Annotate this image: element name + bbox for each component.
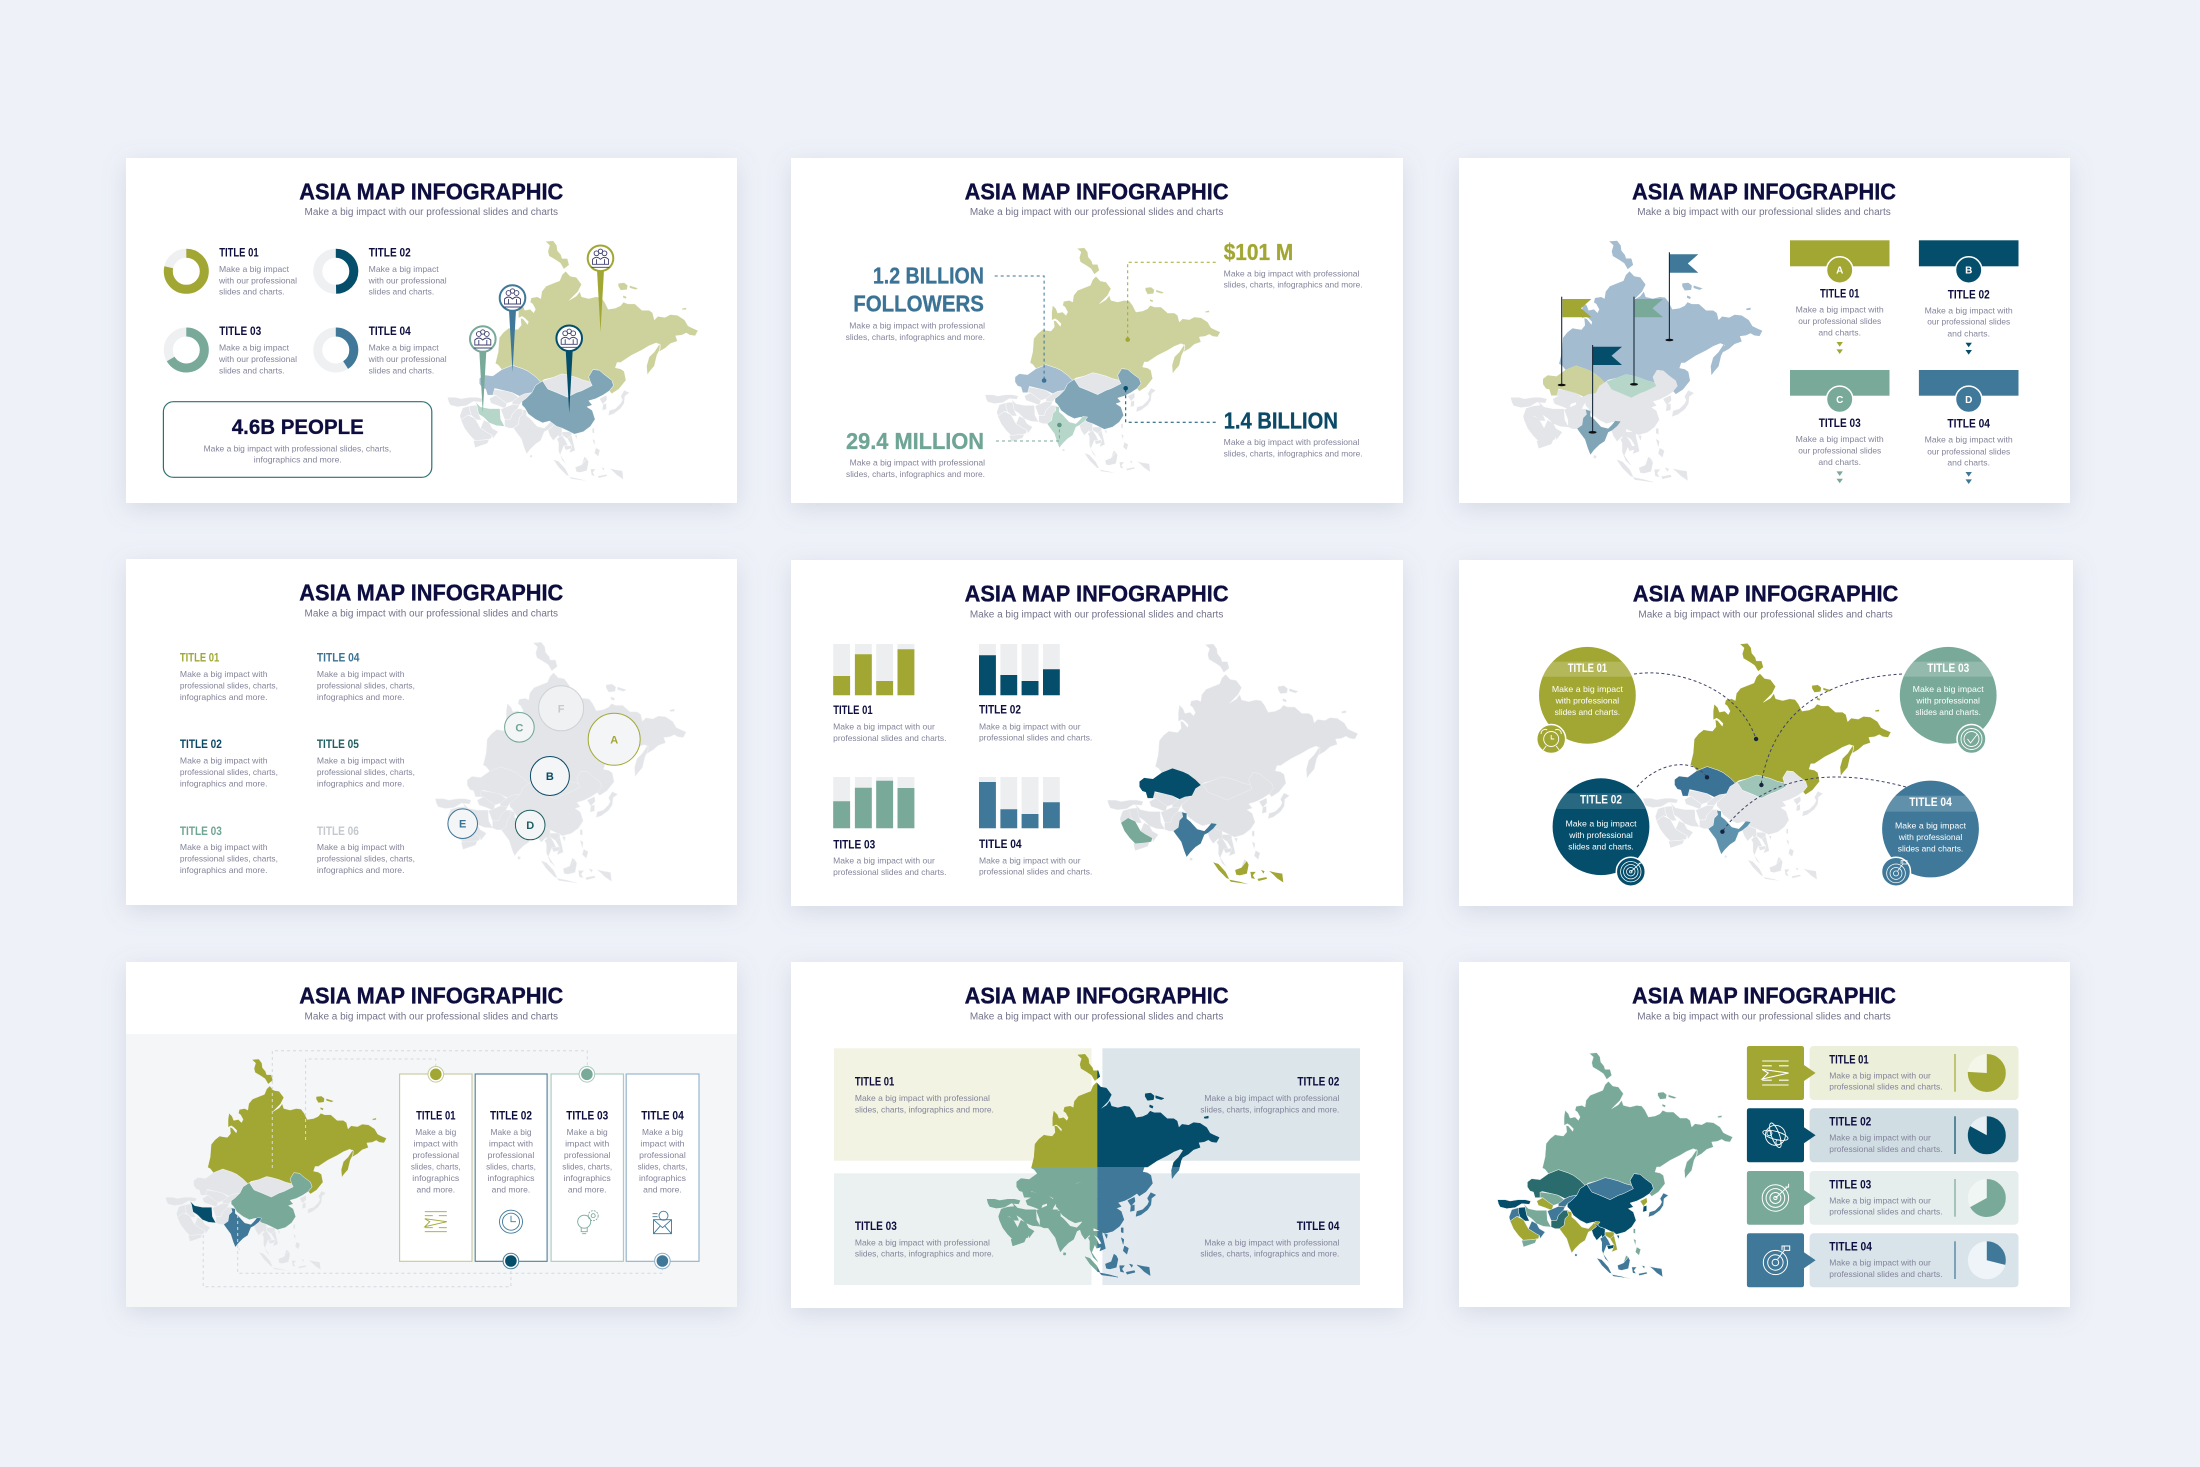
quadrant: title 02	[1102, 1048, 1360, 1161]
text block: title 01: professional slides, charts,	[180, 680, 278, 690]
donut: title 04	[318, 332, 354, 368]
text block: title 01	[218, 248, 297, 297]
row: title 02	[1747, 1108, 2018, 1162]
card: title 03: TITLE 03	[566, 1110, 608, 1122]
text block: title 04: Make a big impact with our	[979, 855, 1081, 865]
text block: title 04: TITLE 04	[369, 326, 411, 338]
text block: title 02: infographics and more.	[180, 778, 268, 788]
card: title 01: TITLE 01	[416, 1110, 456, 1122]
card: title 02: Make a big	[490, 1127, 532, 1137]
map: multi-colour countries	[1497, 1053, 1733, 1279]
text block: title 05: infographics and more.	[317, 778, 404, 788]
bubble: C	[505, 712, 534, 742]
bubble: title 01: Make a big impact	[1552, 684, 1624, 694]
quadrant: title 02: slides, charts, infographics and more.	[1200, 1105, 1339, 1115]
bubble: title 02: TITLE 02	[1580, 795, 1622, 807]
subtitle: Make a big impact with our professional slides and charts	[1637, 1011, 1891, 1022]
text block: title 01: Make a big impact with our	[833, 722, 935, 732]
panel: icon rows with pie charts	[1459, 962, 2070, 1307]
row: title 01: professional slides and charts.	[1829, 1082, 1943, 1092]
map: highlighted regions	[165, 1059, 387, 1271]
bubble: F: F	[558, 704, 565, 716]
panel: flags and lettered cards	[1459, 158, 2070, 503]
row: title 04: TITLE 04	[1829, 1242, 1872, 1254]
text block: title 04	[368, 326, 447, 375]
card: title 01: and more.	[416, 1184, 455, 1194]
subtitle: Make a big impact with our professional slides and charts	[1637, 207, 1891, 218]
dashed connectors	[203, 1051, 662, 1287]
bubble: title 03: with professional	[1915, 695, 1980, 705]
card: C: Make a big impact with	[1796, 434, 1884, 444]
card: A: and charts.	[1818, 328, 1861, 338]
text block: title 01: professional slides and charts.	[833, 733, 946, 743]
stat: $101 M: $101 M	[1224, 239, 1293, 265]
text block: title 02: professional slides, charts,	[180, 767, 278, 777]
flag: dark	[1589, 345, 1622, 434]
text block: title 03: Make a big impact	[219, 343, 290, 353]
bar chart: title 01	[833, 644, 914, 695]
connector: 29.4 million	[996, 423, 1062, 441]
text block: title 03	[833, 839, 946, 877]
subtitle: Make a big impact with our professional slides and charts	[970, 1011, 1223, 1022]
text block: title 03: professional slides and charts.	[833, 867, 946, 877]
card: B	[1919, 240, 2018, 355]
card: title 02: and more.	[492, 1184, 530, 1194]
flag: blue	[1665, 252, 1698, 341]
card: title 04: impact with	[640, 1138, 685, 1148]
map: highlighted regions	[985, 248, 1220, 474]
subtitle: Make a big impact with our professional slides and charts	[305, 609, 558, 620]
stat: 29.4 million: Make a big impact with professional	[850, 458, 985, 468]
donut: title 01	[168, 253, 204, 289]
bubble: B	[530, 756, 569, 796]
title: ASIA MAP INFOGRAPHIC	[1632, 982, 1896, 1008]
card: title 03: and more.	[568, 1184, 606, 1194]
text block: title 03: infographics and more.	[180, 865, 268, 875]
card: D: Make a big impact with	[1925, 435, 2013, 445]
text block: title 02: with our professional	[368, 275, 447, 285]
bar chart: title 04	[979, 777, 1060, 828]
stat: 29.4 million	[846, 428, 985, 479]
card: title 02: slides, charts,	[486, 1161, 536, 1171]
bubble: C: C	[515, 722, 523, 734]
card: A: TITLE 01	[1820, 289, 1860, 301]
text block: title 02: Make a big impact with our	[979, 721, 1081, 731]
donut: title 02	[318, 253, 354, 289]
card: B: Make a big impact with	[1925, 305, 2013, 315]
bar chart: title 02	[979, 644, 1060, 695]
quadrant: title 03: slides, charts, infographics and more.	[855, 1249, 994, 1259]
text block: title 04: TITLE 04	[317, 653, 360, 665]
text block: title 04: Make a big impact	[369, 343, 439, 353]
map: highlighted Russia, Kazakhstan, China, Iran	[447, 241, 698, 481]
row: title 02: Make a big impact with our	[1829, 1133, 1931, 1143]
bubble: D: D	[526, 820, 534, 832]
map: four-colour split	[987, 1054, 1219, 1277]
bubble: title 04: Make a big impact	[1895, 821, 1967, 831]
card: title 04: infographics	[639, 1173, 686, 1183]
connector: title 04	[1720, 777, 1906, 834]
bubble: E	[448, 809, 478, 838]
text block: title 06: Make a big impact with	[317, 842, 405, 852]
bubble: title 03	[1900, 646, 1997, 753]
row: title 01: Make a big impact with our	[1829, 1070, 1931, 1080]
connector: $101 M	[1125, 262, 1216, 342]
text block: title 03	[218, 326, 297, 375]
text block: title 04: with our professional	[368, 354, 447, 364]
title: ASIA MAP INFOGRAPHIC	[299, 579, 563, 605]
row: title 04: Make a big impact with our	[1829, 1258, 1931, 1268]
bubble: A	[588, 713, 640, 765]
card: title 01: Make a big	[415, 1127, 457, 1137]
card: title 04: TITLE 04	[641, 1110, 684, 1122]
text block: title 01: TITLE 01	[219, 248, 259, 260]
card: A: A	[1836, 266, 1843, 276]
bubble: title 01	[1537, 646, 1636, 753]
subtitle: Make a big impact with our professional slides and charts	[970, 610, 1223, 621]
bubble: title 02: Make a big impact	[1566, 818, 1637, 828]
text block: title 04: TITLE 04	[979, 839, 1022, 851]
stat: 1.4 billion: Make a big impact with professional	[1224, 437, 1360, 447]
bubble: title 03: slides and charts.	[1915, 707, 1981, 717]
card: title 03: infographics	[564, 1173, 611, 1183]
card: C: C	[1836, 395, 1843, 406]
card: A: our professional slides	[1798, 316, 1881, 326]
card: title 02: professional	[488, 1150, 534, 1160]
bubble: A: A	[610, 734, 618, 746]
text block: title 03	[180, 826, 278, 875]
stat: 1.2 billion followers: 1.2 BILLION	[873, 262, 984, 288]
connector: title 01	[1634, 673, 1758, 741]
title: ASIA MAP INFOGRAPHIC	[965, 178, 1229, 204]
text block: title 02: TITLE 02	[369, 248, 411, 260]
text block: title 03: slides and charts.	[219, 365, 284, 375]
text block: title 06	[317, 826, 415, 875]
quadrant: title 03: Make a big impact with professional	[855, 1237, 990, 1247]
text block: title 03: Make a big impact with our	[833, 856, 935, 866]
connector: title 02	[1637, 765, 1709, 787]
card: B: TITLE 02	[1948, 289, 1990, 301]
row: title 01: TITLE 01	[1829, 1054, 1869, 1066]
card: title 03: slides, charts,	[562, 1161, 612, 1171]
title: ASIA MAP INFOGRAPHIC	[299, 982, 563, 1008]
row: title 03: Make a big impact with our	[1829, 1195, 1931, 1205]
panel: quadrants	[791, 962, 1403, 1308]
flag: olive	[1558, 297, 1591, 386]
quadrant: title 01: TITLE 01	[855, 1077, 895, 1089]
map pin: blue	[500, 285, 525, 372]
card: title 03: impact with	[565, 1138, 610, 1148]
stat: 1.2 billion followers: FOLLOWERS	[853, 291, 984, 317]
card: C: our professional slides	[1798, 446, 1881, 456]
connector: title 03	[1759, 674, 1902, 787]
text block: title 04: Make a big impact with	[317, 669, 405, 679]
card: title 04: slides, charts,	[638, 1161, 687, 1171]
text block: title 04	[979, 839, 1092, 877]
card: C	[1790, 370, 1890, 483]
card: title 03: Make a big	[567, 1127, 608, 1137]
stat: 1.2 billion followers	[846, 262, 985, 342]
panel: key figures	[791, 158, 1403, 503]
text block: title 04: professional slides, charts,	[317, 680, 415, 690]
bubble: title 01: slides and charts.	[1555, 707, 1620, 717]
bubble: title 03: TITLE 03	[1927, 663, 1969, 675]
bubble: title 04: slides and charts.	[1898, 844, 1963, 854]
text block: title 03: professional slides, charts,	[180, 853, 278, 863]
card: title 03: professional	[564, 1150, 611, 1160]
text block: title 03: Make a big impact with	[180, 842, 268, 852]
quadrant: title 04	[1102, 1173, 1360, 1285]
text block: title 02: professional slides and charts.	[979, 733, 1092, 743]
card: title 04: professional	[639, 1150, 686, 1160]
panel: circles with dashed connectors	[1459, 560, 2073, 906]
card: title 04: and more.	[643, 1184, 682, 1194]
card: title 02: infographics	[488, 1173, 534, 1183]
flag: teal	[1630, 297, 1663, 386]
text block: title 04: slides and charts.	[369, 365, 434, 375]
title: ASIA MAP INFOGRAPHIC	[299, 178, 563, 204]
card: title 01: professional	[412, 1150, 459, 1160]
stat: $101 M: Make a big impact with professional	[1224, 268, 1360, 278]
card: title 04: Make a big	[642, 1127, 683, 1137]
map: highlighted countries	[1108, 644, 1358, 884]
text block: title 05: TITLE 05	[317, 739, 359, 751]
card: D: TITLE 04	[1947, 419, 1991, 431]
text block: title 02: Make a big impact with	[180, 755, 268, 765]
text block: title 01: infographics and more.	[180, 692, 268, 702]
panel: bar charts	[791, 560, 1403, 906]
quadrant: title 01: slides, charts, infographics and more.	[855, 1105, 994, 1115]
text block: title 03: TITLE 03	[219, 326, 261, 338]
panel: six titles and lettered bubbles	[126, 559, 737, 905]
row: title 04: professional slides and charts.	[1829, 1269, 1943, 1279]
text block: title 02: TITLE 02	[979, 705, 1021, 717]
text block: title 02	[180, 739, 278, 788]
row: title 02: professional slides and charts.	[1829, 1144, 1943, 1154]
text block: title 05: professional slides, charts,	[317, 767, 415, 777]
card: C: TITLE 03	[1819, 418, 1861, 430]
donut: title 03	[168, 332, 204, 368]
text block: title 01: slides and charts.	[219, 287, 284, 297]
title: ASIA MAP INFOGRAPHIC	[1633, 580, 1898, 606]
text block: title 06: infographics and more.	[317, 865, 404, 875]
card: title 01: infographics	[412, 1173, 459, 1183]
card: title 04	[626, 1074, 699, 1269]
card: D	[1919, 370, 2018, 484]
map: highlighted regions	[1643, 643, 1891, 881]
row: title 02: TITLE 02	[1829, 1117, 1871, 1129]
quadrant: title 04: TITLE 04	[1297, 1221, 1340, 1233]
title: ASIA MAP INFOGRAPHIC	[965, 580, 1229, 606]
bubble: F	[539, 686, 584, 731]
card: title 03	[551, 1066, 623, 1261]
quadrant: title 03	[834, 1173, 1092, 1285]
card: title 01: impact with	[414, 1138, 458, 1148]
text block: title 06: professional slides, charts,	[317, 853, 415, 863]
callout: 4.6B people: infographics and more.	[254, 455, 342, 465]
stat: 1.2 billion followers: slides, charts, infographics and more.	[846, 332, 985, 342]
card: D: D	[1965, 395, 1972, 406]
text block: title 01	[180, 653, 278, 702]
card: title 02: impact with	[489, 1138, 534, 1148]
map pin: teal	[470, 326, 496, 413]
quadrant: title 01	[834, 1048, 1092, 1161]
stat: 29.4 million: 29.4 MILLION	[846, 428, 984, 454]
card: D: our professional slides	[1927, 446, 2010, 456]
text block: title 01: TITLE 01	[833, 705, 873, 717]
card: B: our professional slides	[1927, 317, 2010, 327]
text block: title 04	[317, 653, 415, 702]
card: title 02: TITLE 02	[490, 1110, 532, 1122]
card: title 01	[400, 1066, 472, 1261]
quadrant: title 01: Make a big impact with professional	[855, 1093, 990, 1103]
text block: title 01: with our professional	[218, 275, 297, 285]
title: ASIA MAP INFOGRAPHIC	[965, 982, 1229, 1008]
bubble: B: B	[546, 771, 554, 783]
text block: title 01: TITLE 01	[180, 653, 220, 665]
text block: title 03: TITLE 03	[180, 826, 222, 838]
bubble: title 04	[1882, 780, 1979, 886]
quadrant: title 04: slides, charts, infographics and more.	[1200, 1249, 1339, 1259]
stat: 1.2 billion followers: Make a big impact with professional	[849, 320, 985, 330]
card: D: and charts.	[1947, 458, 1990, 468]
card: B: B	[1965, 266, 1972, 276]
bubble: D	[515, 810, 545, 840]
card: A: Make a big impact with	[1796, 305, 1884, 315]
connector: 1.4 billion	[1123, 386, 1216, 422]
text block: title 02	[368, 248, 447, 297]
bubble: title 02: with professional	[1568, 830, 1633, 840]
bubble: title 02	[1552, 778, 1650, 886]
connector: 1.2 billion	[995, 276, 1046, 383]
bubble: title 03: Make a big impact	[1913, 684, 1984, 694]
text block: title 01: Make a big impact	[219, 264, 290, 274]
bubble: title 02: slides and charts.	[1568, 841, 1634, 851]
subtitle: Make a big impact with our professional slides and charts	[1638, 610, 1893, 621]
quadrant: title 04: Make a big impact with professional	[1204, 1237, 1340, 1247]
callout: 4.6B people: Make a big impact with professional slides, charts,	[204, 443, 391, 453]
text block: title 02	[979, 705, 1092, 743]
text block: title 03: with our professional	[218, 354, 297, 364]
bubble: title 01: TITLE 01	[1568, 663, 1608, 675]
map pin: olive	[588, 245, 613, 332]
card: title 01: slides, charts,	[411, 1161, 461, 1171]
title: ASIA MAP INFOGRAPHIC	[1632, 178, 1896, 204]
card: title 02	[475, 1074, 547, 1269]
quadrant: title 02: Make a big impact with professional	[1204, 1093, 1340, 1103]
stat: 1.4 billion: slides, charts, infographics and more.	[1224, 448, 1363, 458]
text block: title 01: Make a big impact with	[180, 669, 268, 679]
text block: title 06: TITLE 06	[317, 826, 359, 838]
map: all grey	[435, 642, 686, 883]
map: highlighted regions	[1511, 241, 1762, 482]
text block: title 03: TITLE 03	[833, 839, 875, 851]
panel: four vertical cards	[126, 962, 737, 1307]
row: title 03: professional slides and charts.	[1829, 1207, 1943, 1217]
text block: title 05	[317, 739, 415, 788]
text block: title 04: professional slides and charts.	[979, 867, 1092, 877]
stat: $101 M	[1224, 239, 1363, 290]
panel: donut charts with map pins	[126, 158, 737, 503]
bubble: E: E	[459, 819, 466, 831]
quadrant: title 02: TITLE 02	[1297, 1077, 1339, 1089]
stat: $101 M: slides, charts, infographics and more.	[1224, 280, 1363, 290]
subtitle: Make a big impact with our professional slides and charts	[305, 207, 558, 218]
text block: title 01	[833, 705, 946, 743]
bubble: title 04: with professional	[1898, 832, 1962, 842]
card: B: and charts.	[1947, 328, 1990, 338]
bubble: title 04: TITLE 04	[1909, 797, 1952, 809]
subtitle: Make a big impact with our professional slides and charts	[305, 1011, 558, 1022]
card: A	[1790, 240, 1890, 354]
stat: 1.4 billion	[1224, 407, 1363, 458]
bar chart: title 03	[833, 777, 914, 828]
subtitle: Make a big impact with our professional slides and charts	[970, 207, 1223, 218]
text block: title 02: slides and charts.	[369, 287, 434, 297]
stat: 29.4 million: slides, charts, infographics and more.	[846, 469, 985, 479]
callout: 4.6B people: 4.6B PEOPLE	[232, 415, 364, 439]
row: title 03	[1747, 1171, 2018, 1225]
row: title 03: TITLE 03	[1829, 1179, 1871, 1191]
quadrant: title 03: TITLE 03	[855, 1221, 897, 1233]
map pin: dark	[556, 326, 582, 413]
text block: title 05: Make a big impact with	[317, 755, 405, 765]
text block: title 02: TITLE 02	[180, 739, 222, 751]
bubble: title 01: with professional	[1555, 695, 1619, 705]
callout: 4.6B people	[163, 402, 432, 477]
stat: 1.4 billion: 1.4 BILLION	[1224, 407, 1338, 433]
row: title 04	[1747, 1233, 2018, 1287]
row: title 01	[1747, 1046, 2018, 1100]
card: C: and charts.	[1818, 457, 1861, 467]
text block: title 02: Make a big impact	[369, 264, 439, 274]
text block: title 04: infographics and more.	[317, 692, 404, 702]
